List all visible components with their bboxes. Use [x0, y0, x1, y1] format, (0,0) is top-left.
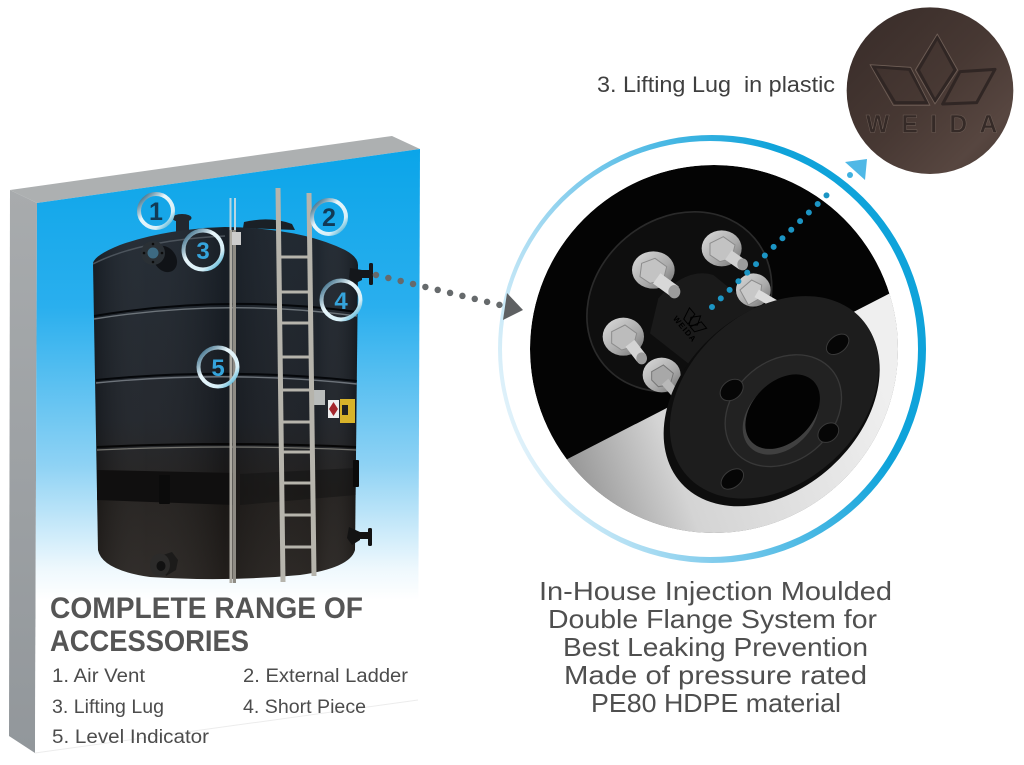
photo: double flange — [530, 165, 921, 549]
body logo — [674, 307, 708, 342]
short piece nozzle — [349, 263, 373, 285]
rear flange — [586, 211, 772, 392]
board top edge — [10, 136, 420, 203]
connecting body — [650, 273, 757, 370]
flange assembly — [586, 211, 880, 506]
panel: accessories board — [9, 136, 420, 753]
heading: complete range of accessories: ACCESSORIES — [50, 625, 249, 658]
tank body — [90, 220, 360, 585]
air vent nozzle — [172, 214, 192, 234]
flange description: Made of pressure rated — [564, 660, 867, 690]
accessories list: 3. Lifting Lug — [52, 697, 164, 718]
weida lettering: WEIDA — [866, 112, 998, 139]
top manway — [243, 219, 295, 230]
arrow: grey dotted to flange — [376, 275, 523, 320]
blue gradient ring — [498, 135, 926, 563]
level indicator — [230, 198, 241, 583]
accessories list: 1. Air Vent — [52, 666, 146, 687]
badge 5 — [198, 348, 238, 386]
badge 4: 4 — [334, 288, 348, 315]
weida logo — [873, 37, 995, 104]
flange hub — [724, 354, 842, 468]
front flange — [664, 320, 880, 506]
accessories list: 4. Short Piece — [243, 697, 366, 718]
badge 5: 5 — [211, 355, 225, 382]
badge 3: 3 — [196, 238, 210, 265]
side handles — [159, 460, 359, 504]
flange description: Double Flange System for — [548, 604, 877, 634]
accessories list: 5. Level Indicator — [52, 727, 210, 748]
arrow: blue dotted to lifting lug — [712, 159, 867, 307]
flange description: PE80 HDPE material — [591, 688, 841, 718]
flange description: In-House Injection Moulded — [539, 576, 892, 606]
rear bolts — [603, 230, 775, 395]
badge 4 — [322, 280, 360, 320]
badge 1 — [139, 194, 173, 228]
heading: complete range of accessories: COMPLETE RANGE OF — [50, 592, 363, 625]
flange bolt holes — [716, 330, 853, 493]
lower right nozzle — [347, 527, 372, 546]
bottom flange nozzle — [150, 552, 178, 576]
board face — [35, 149, 420, 753]
external ladder — [278, 188, 314, 582]
body logo: WEIDA — [671, 314, 698, 344]
caption: lifting lug: 3. Lifting Lug in plastic — [597, 72, 835, 97]
badge 2: 2 — [322, 204, 336, 232]
safety stickers — [313, 390, 355, 423]
accessories list: 2. External Ladder — [243, 666, 409, 687]
tank illustration — [90, 188, 373, 585]
accessories list — [52, 666, 409, 748]
upper flange nozzle — [141, 241, 182, 277]
flange description — [539, 576, 892, 718]
board left edge — [9, 190, 37, 753]
callout number badges — [139, 194, 360, 386]
badge 2 — [312, 200, 346, 234]
heading: complete range of accessories — [50, 592, 363, 658]
flange description: Best Leaking Prevention — [563, 632, 868, 662]
medallion: weida lifting lug — [847, 7, 1013, 174]
badge 3 — [184, 230, 222, 270]
badge 1: 1 — [149, 198, 163, 226]
foam background — [567, 294, 898, 533]
